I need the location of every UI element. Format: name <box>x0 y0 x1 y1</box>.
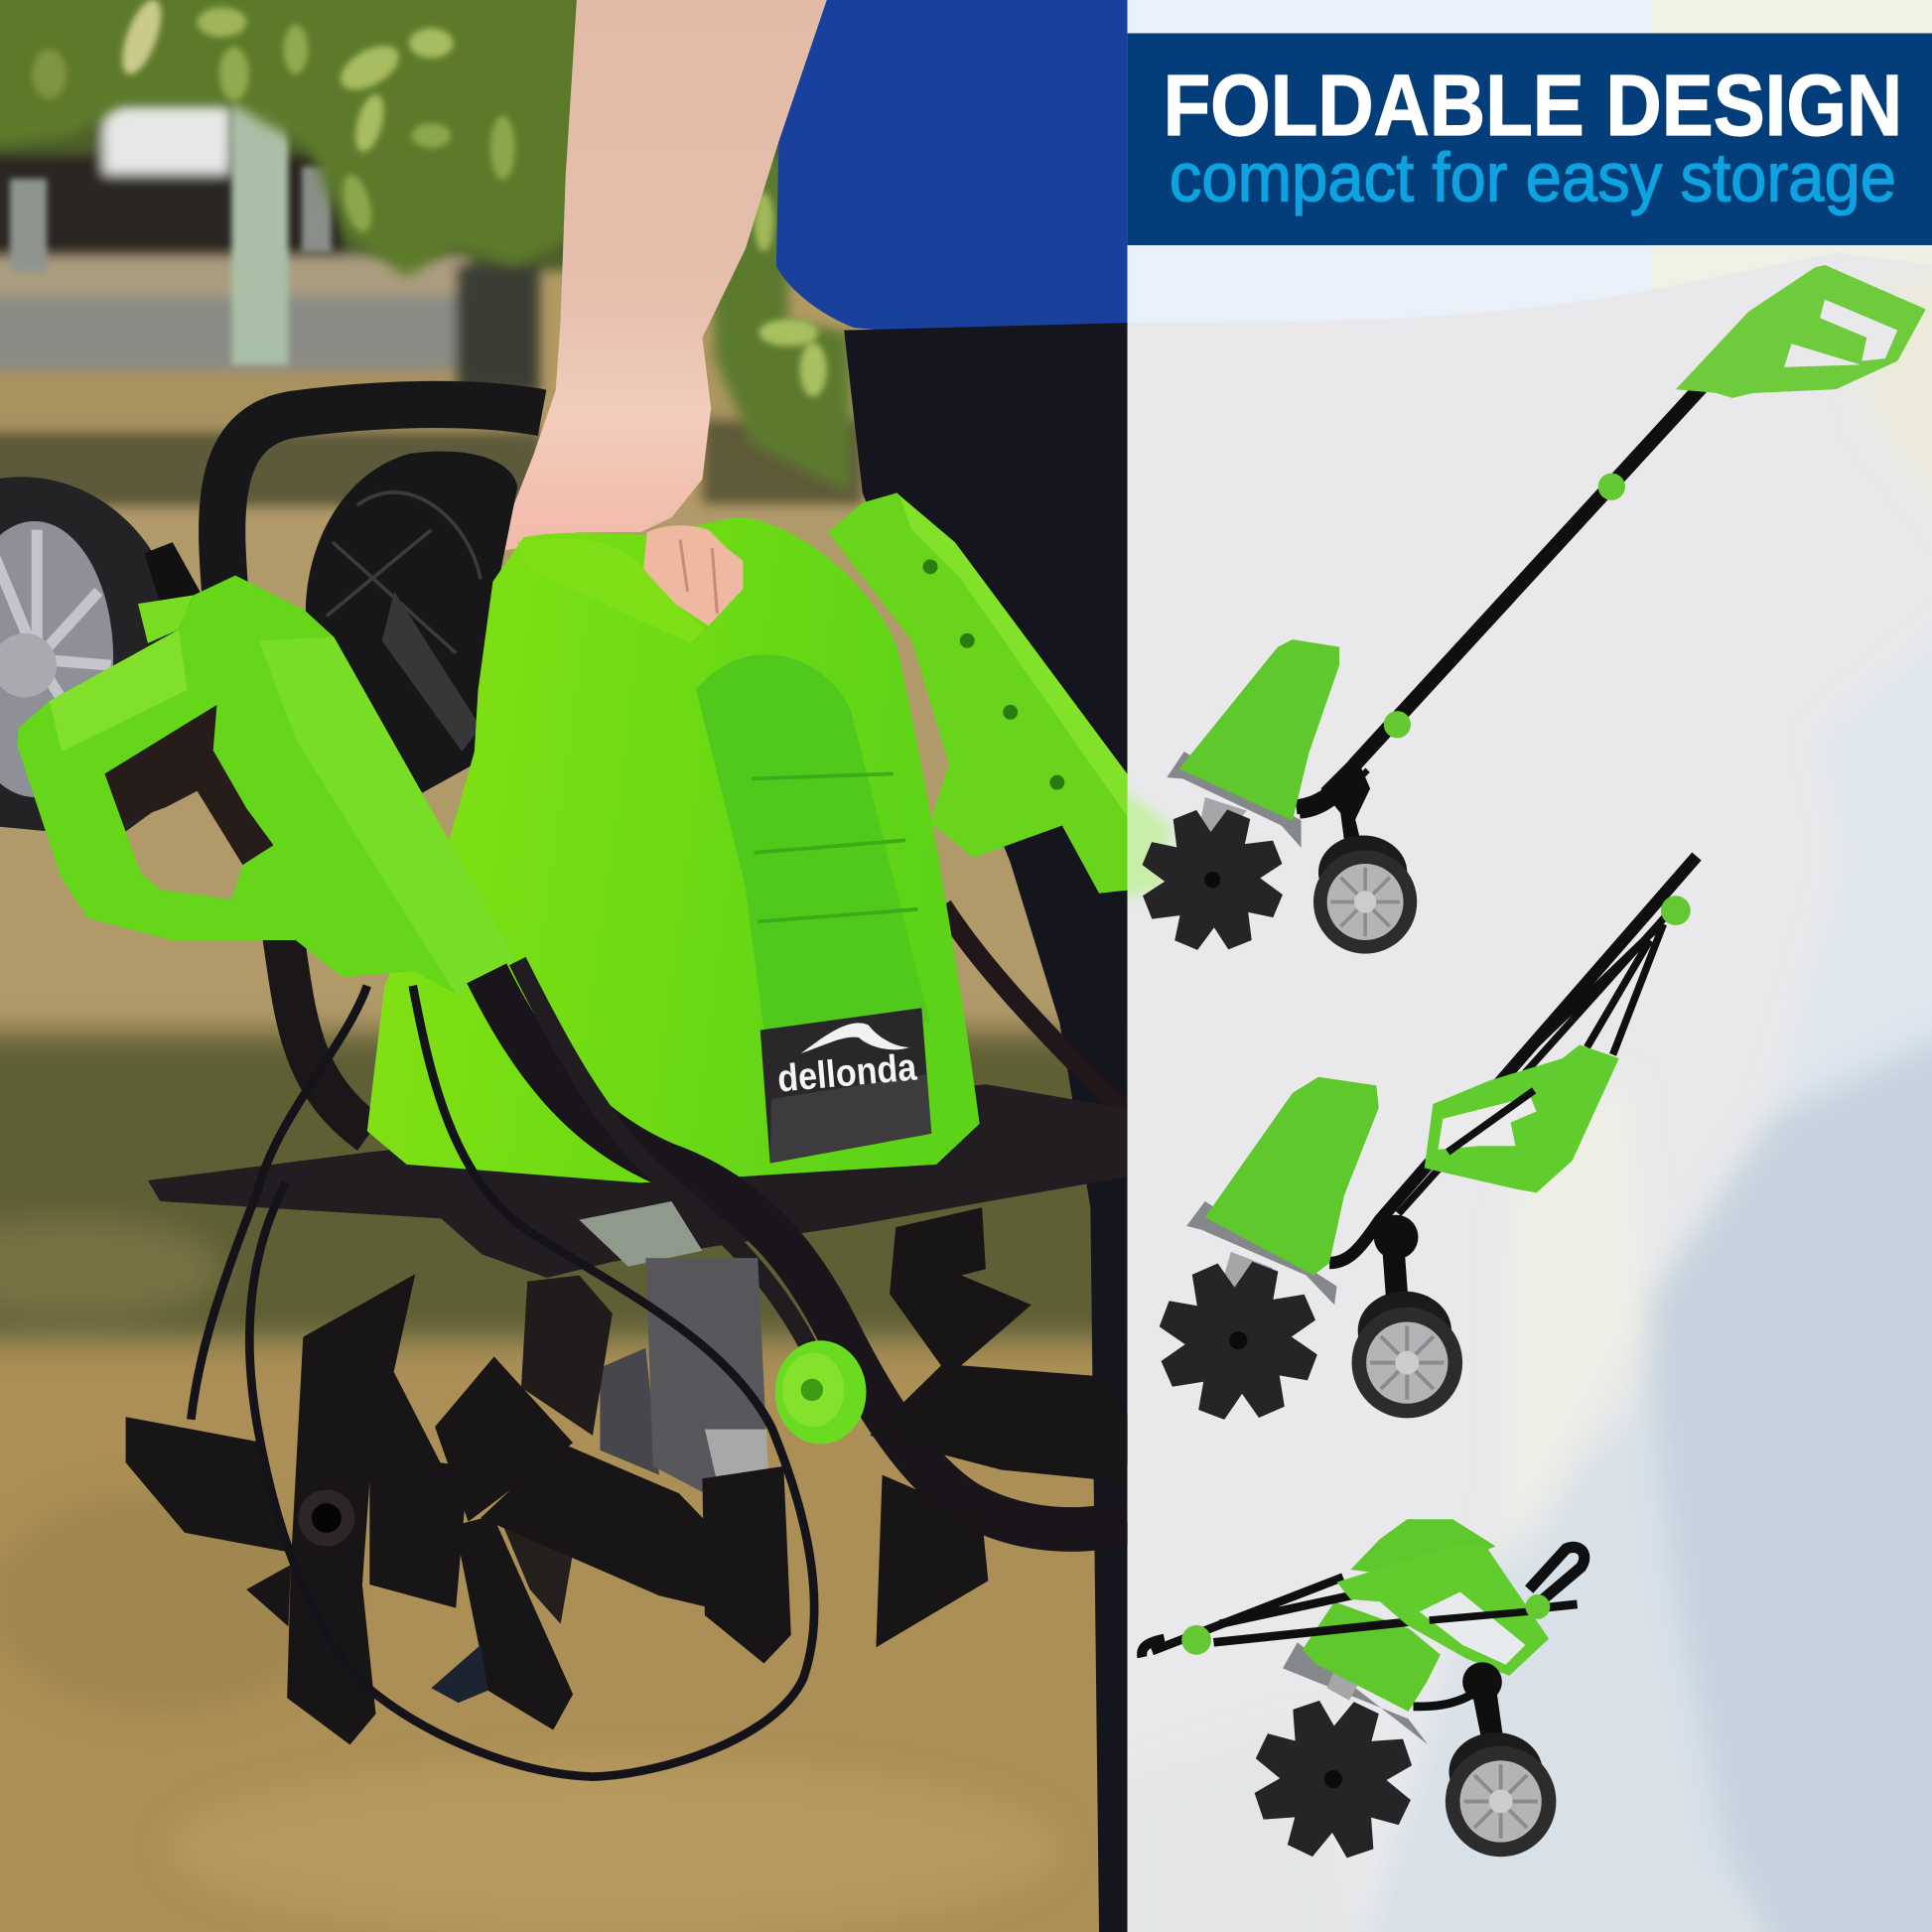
tiller: green adjustment knob <box>775 1340 866 1445</box>
tiller: rear wheel right <box>306 452 517 794</box>
tiller: shaft <box>600 1258 771 1545</box>
foliage <box>0 0 850 492</box>
tiller: rear frame tube behind housing <box>942 905 1128 1115</box>
tiller: top fold handle bar <box>222 404 542 598</box>
person: dark trousers <box>844 323 1128 1932</box>
small tiller: fully folded <box>1142 1519 1585 1877</box>
heading banner <box>1128 34 1932 245</box>
tiller: rear wheel left <box>0 477 204 838</box>
tiller: secondary tube <box>517 961 813 1355</box>
tiller: dellonda logo plate: dellonda <box>775 1045 918 1101</box>
tiller: soil guard plate <box>148 1084 1128 1278</box>
hand fingers gripping the handle <box>643 525 743 625</box>
tiller: power cable <box>191 986 814 1777</box>
tiller: left green handle <box>17 576 516 995</box>
small tiller: half folded <box>1146 857 1697 1434</box>
tiller: dark parts seen through left handle <box>104 705 274 865</box>
tiller: motor housing <box>367 517 980 1182</box>
photo: garden background <box>0 0 1146 1932</box>
person: blue polo shirt <box>776 0 1128 336</box>
small tiller: fully unfolded <box>1127 265 1926 965</box>
person: arm and hand <box>495 0 827 552</box>
tiller: dellonda logo plate <box>760 1008 931 1164</box>
tiller: reflection under housing <box>579 1201 702 1267</box>
photo overlay: right panel faded background <box>1109 0 1932 1932</box>
subtitle: compact for easy storage <box>1170 138 1896 215</box>
tiller: rear fold tube <box>283 936 369 1134</box>
tiller: right green handle <box>828 492 1134 894</box>
tiller: black main tube <box>486 973 1128 1529</box>
tiller: tines <box>126 1207 1131 1744</box>
